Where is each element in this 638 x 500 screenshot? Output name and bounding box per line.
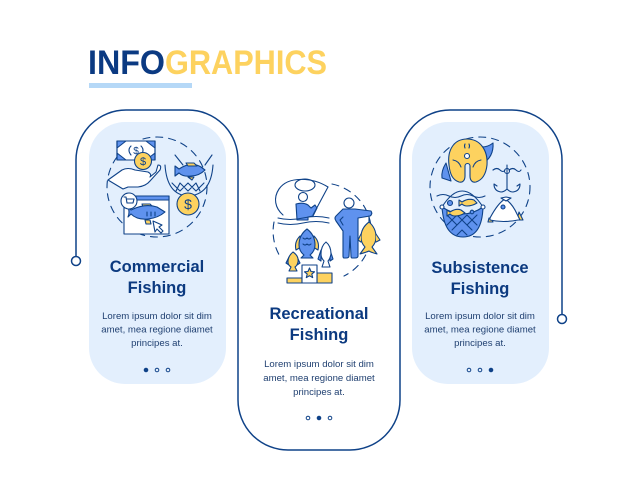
text: subsistence [424,311,536,349]
panel background: subsistence [412,122,549,384]
heading: recreational [269,305,369,344]
icon: commercial fishing [107,137,213,237]
heading: subsistence: Subsistence [431,259,529,277]
text: recreational [263,359,375,398]
text: subsistence: amet, mea regione diamet [424,324,536,336]
text: recreational: Lorem ipsum dolor sit dim [264,359,374,370]
hook [493,165,521,192]
title underline [89,83,192,88]
coin: $ [140,156,146,168]
banknote: $ [133,146,139,157]
text: commercial: principes at. [131,338,183,349]
net of fish [437,191,485,237]
text: recreational: amet, mea regione diamet [263,373,375,384]
salmon steak [442,139,493,182]
pagination dots: commercial [144,368,170,372]
heading: commercial [110,258,204,297]
fisherman [276,179,329,224]
podium with star [287,265,332,283]
title: GRAPHICS [165,44,327,82]
browser window [121,193,169,234]
text: subsistence: Lorem ipsum dolor sit dim [425,311,535,322]
icon: subsistence fishing [430,137,530,237]
heading: subsistence [431,259,529,298]
icon: recreational fishing [273,179,380,283]
standing man with fish [335,198,380,258]
pagination dots: recreational [306,416,332,420]
net with fish [165,155,213,196]
text: commercial: amet, mea regione diamet [101,324,213,336]
pagination dots: subsistence [467,368,493,372]
title [88,44,327,82]
heading: commercial: Commercial [110,258,204,276]
coin under net: $ [184,196,192,212]
trophy fish [286,229,333,271]
fish head [488,197,523,222]
heading: subsistence: Fishing [451,280,509,298]
heading: recreational: Recreational [269,305,369,323]
hand [108,165,161,189]
text: subsistence: principes at. [454,338,506,349]
title: INFO [88,44,165,82]
text: commercial: Lorem ipsum dolor sit dim [102,311,212,322]
connecting outline [72,110,566,450]
text: recreational: principes at. [293,387,345,398]
heading: commercial: Fishing [128,279,186,297]
text: commercial [101,311,213,349]
heading: recreational: Fishing [290,326,348,344]
panel background: commercial [89,122,226,384]
